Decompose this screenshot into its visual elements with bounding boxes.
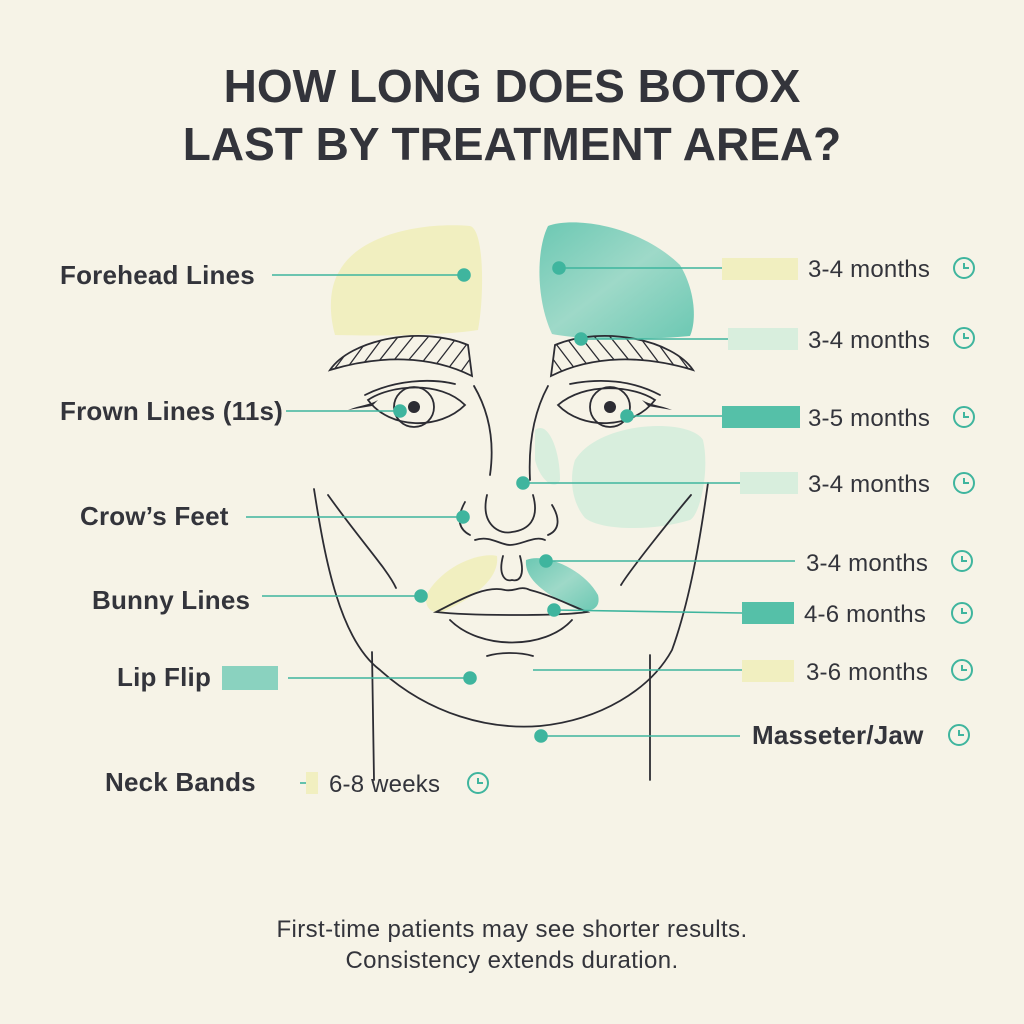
duration texts: 3-4 months <box>808 256 930 283</box>
zone: cheek <box>572 426 705 528</box>
duration texts: 3-4 months <box>806 550 928 577</box>
left labels: Lip Flip <box>117 662 211 692</box>
duration texts: 6-8 weeks <box>329 771 440 798</box>
footer note: First-time patients may see shorter results. <box>276 916 748 943</box>
duration texts: 4-6 months <box>804 601 926 628</box>
title: LAST BY TREATMENT AREA? <box>183 118 841 170</box>
zone: lip yellow <box>426 555 497 613</box>
title: HOW LONG DOES BOTOX <box>224 60 801 112</box>
duration texts <box>329 256 930 798</box>
footer note <box>276 916 748 974</box>
left labels: Masseter/Jaw <box>752 720 924 750</box>
duration bars <box>222 258 800 794</box>
left labels <box>60 260 924 797</box>
duration texts: 3-5 months <box>808 405 930 432</box>
nose <box>474 386 548 480</box>
face outline <box>314 483 708 727</box>
duration texts: 3-6 months <box>806 659 928 686</box>
left labels: Crow’s Feet <box>80 501 229 531</box>
eyebrows <box>330 336 472 376</box>
left labels: Forehead Lines <box>60 260 255 290</box>
left labels: Frown Lines (11s) <box>60 396 283 426</box>
left labels: Bunny Lines <box>92 585 250 615</box>
left labels: Neck Bands <box>105 767 256 797</box>
zone: lip teal <box>526 558 599 611</box>
duration texts: 3-4 months <box>808 327 930 354</box>
leader lines and dots <box>246 262 795 783</box>
zone: forehead left <box>331 225 482 335</box>
clock icons <box>468 258 974 793</box>
title <box>183 60 841 170</box>
face illustration <box>314 222 708 780</box>
eyes <box>368 388 465 423</box>
footer note: Consistency extends duration. <box>345 947 679 974</box>
zone: forehead right <box>539 222 694 339</box>
lips <box>436 588 587 615</box>
duration texts: 3-4 months <box>808 471 930 498</box>
